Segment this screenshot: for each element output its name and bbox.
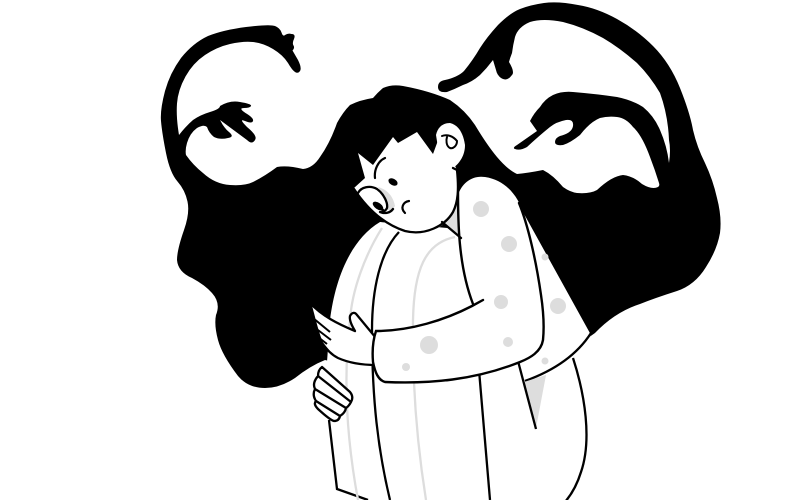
brow xyxy=(375,158,385,178)
finger lines xyxy=(313,318,331,344)
face xyxy=(354,132,458,233)
shadow edge line xyxy=(518,361,536,429)
ear detail xyxy=(442,135,457,148)
fist with four fingers xyxy=(314,367,352,421)
sleeve outline xyxy=(373,190,544,382)
neck shadow xyxy=(441,200,461,238)
gray sleeve dots xyxy=(402,201,566,371)
nose blob xyxy=(371,200,385,212)
head xyxy=(354,123,465,238)
gray shading lines xyxy=(346,228,455,500)
mouth xyxy=(402,201,409,213)
center leg line xyxy=(479,370,490,500)
gray shadow under arm xyxy=(524,375,546,428)
left knee xyxy=(327,222,500,500)
ear xyxy=(436,123,465,168)
jaw outline xyxy=(354,168,461,238)
eye xyxy=(387,177,399,187)
knee lower outline xyxy=(329,420,368,500)
girl: back and legs xyxy=(327,203,591,500)
right back outline xyxy=(525,333,591,500)
cheek shading xyxy=(378,187,395,210)
nose curl xyxy=(358,187,393,213)
right arm sleeve xyxy=(373,177,543,382)
inner leg line xyxy=(372,232,399,500)
back and right side xyxy=(450,203,591,500)
left hand with fingers xyxy=(310,303,376,365)
black hair silhouette with shadow hands xyxy=(161,2,721,400)
finger separators xyxy=(315,376,351,416)
